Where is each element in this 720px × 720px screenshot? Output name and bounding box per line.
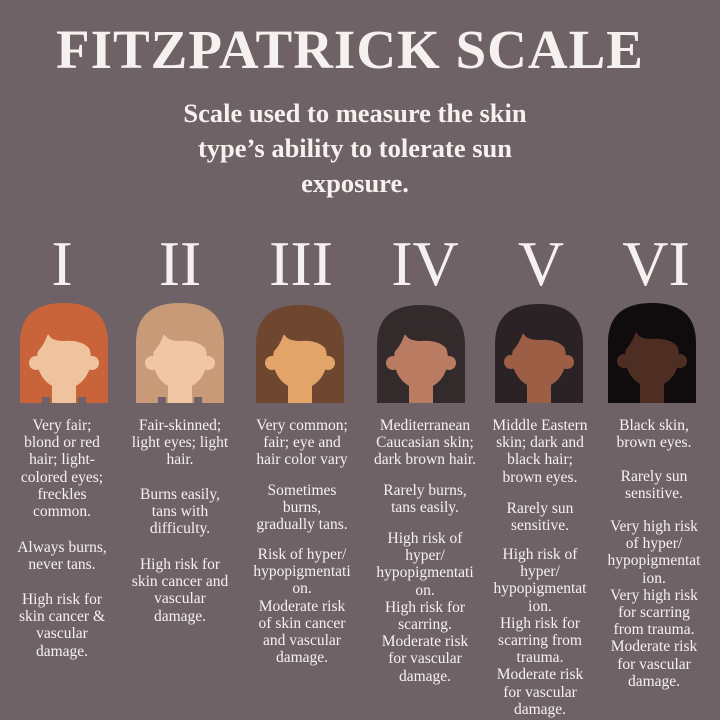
heads: [20, 303, 696, 403]
column VI text: Very high risk: [610, 587, 698, 604]
column VI text: for scarring: [618, 604, 690, 621]
column IV text: for vascular: [388, 650, 462, 667]
column III text: Moderate risk: [259, 598, 345, 615]
column I text: common.: [33, 503, 91, 520]
column I text: damage.: [36, 643, 88, 660]
column V text: black hair;: [507, 451, 573, 468]
column IV text: hyper/: [405, 547, 445, 564]
column IV text: hypopigmentati: [376, 564, 474, 581]
column II text: damage.: [154, 608, 206, 625]
column IV text: High risk of: [388, 530, 462, 547]
column III text: Very common;: [256, 417, 348, 434]
numerals: III: [269, 228, 333, 299]
column VI text: damage.: [628, 673, 680, 690]
column IV text: scarring.: [398, 616, 452, 633]
subtitle: [183, 98, 527, 198]
numerals: II: [159, 228, 201, 299]
column IV text: damage.: [399, 668, 451, 685]
column VI text: ion.: [642, 570, 666, 587]
column V text: scarring from: [498, 632, 582, 649]
column V text: trauma.: [517, 649, 563, 666]
column VI text: Moderate risk: [611, 638, 697, 655]
head V: [495, 304, 583, 403]
column V text: skin; dark and: [496, 434, 584, 451]
column VI text: of hyper/: [626, 535, 682, 552]
numerals: VI: [622, 228, 690, 299]
column II text: vascular: [154, 590, 206, 607]
column III text: hypopigmentati: [253, 563, 351, 580]
column III text: Risk of hyper/: [258, 546, 346, 563]
column IV text: Mediterranean: [380, 417, 470, 434]
column I text: colored eyes;: [21, 469, 103, 486]
subtitle: exposure.: [301, 168, 409, 198]
column VI text: brown eyes.: [617, 434, 691, 451]
column I text: High risk for: [22, 591, 102, 608]
column VI text: Very high risk: [610, 518, 698, 535]
column II text: Fair-skinned;: [139, 417, 221, 434]
column VI text: for vascular: [617, 656, 691, 673]
column III text: gradually tans.: [256, 516, 348, 533]
column I text: [17, 417, 107, 660]
head IV: [377, 305, 465, 403]
column III text: burns,: [283, 499, 321, 516]
column II text: difficulty.: [150, 520, 210, 537]
column III text: damage.: [276, 649, 328, 666]
subtitle: type’s ability to tolerate sun: [198, 133, 512, 163]
column VI text: [608, 417, 700, 690]
column VI text: hypopigmentat: [608, 552, 700, 569]
column II text: light eyes; light: [132, 434, 228, 451]
head II: [136, 303, 224, 403]
column IV text: [374, 417, 476, 685]
column II text: skin cancer and: [132, 573, 228, 590]
column VI text: sensitive.: [625, 485, 683, 502]
column V text: for vascular: [503, 684, 577, 701]
head VI: [608, 303, 696, 403]
column III text: and vascular: [263, 632, 341, 649]
column IV text: High risk for: [385, 599, 465, 616]
column I text: blond or red: [24, 434, 100, 451]
column I text: skin cancer &: [19, 608, 105, 625]
column V text: Moderate risk: [497, 666, 583, 683]
column IV text: Moderate risk: [382, 633, 468, 650]
column III text: on.: [292, 580, 312, 597]
column V text: Rarely sun: [507, 500, 573, 517]
numerals: I: [51, 228, 73, 299]
column VI text: from trauma.: [614, 621, 694, 638]
column V text: ion.: [528, 598, 552, 615]
column I text: freckles: [37, 486, 87, 503]
numerals: [51, 228, 690, 299]
column I text: vascular: [36, 625, 88, 642]
column IV text: Rarely burns,: [383, 482, 467, 499]
column IV text: on.: [415, 582, 435, 599]
column I text: hair; light-: [29, 451, 95, 468]
column V text: damage.: [514, 701, 566, 718]
head III: [256, 305, 344, 403]
column VI text: Black skin,: [619, 417, 689, 434]
column I text: Very fair;: [33, 417, 91, 434]
column II text: Burns easily,: [140, 486, 220, 503]
column II text: hair.: [166, 451, 194, 468]
column IV text: dark brown hair.: [374, 451, 476, 468]
column III text: of skin cancer: [259, 615, 345, 632]
numerals: IV: [391, 228, 459, 299]
column I text: Always burns,: [17, 539, 107, 556]
numerals: V: [518, 228, 564, 299]
column III text: hair color vary: [256, 451, 348, 468]
column V text: hypopigmentat: [494, 580, 586, 597]
subtitle: Scale used to measure the skin: [183, 98, 527, 128]
column I text: never tans.: [28, 556, 96, 573]
column II text: [132, 417, 228, 625]
column II text: High risk for: [140, 556, 220, 573]
head I: [20, 303, 108, 403]
column V text: brown eyes.: [503, 469, 577, 486]
column V text: Middle Eastern: [492, 417, 588, 434]
column III text: fair; eye and: [263, 434, 341, 451]
column V text: High risk of: [503, 546, 577, 563]
column VI text: Rarely sun: [621, 468, 687, 485]
column II text: tans with: [152, 503, 208, 520]
column IV text: tans easily.: [391, 499, 459, 516]
column III text: [253, 417, 351, 666]
column V text: sensitive.: [511, 517, 569, 534]
column V text: High risk for: [500, 615, 580, 632]
column III text: Sometimes: [268, 482, 336, 499]
title: FITZPATRICK SCALE: [56, 19, 644, 80]
column IV text: Caucasian skin;: [376, 434, 474, 451]
column V text: [492, 417, 588, 718]
column V text: hyper/: [520, 563, 560, 580]
